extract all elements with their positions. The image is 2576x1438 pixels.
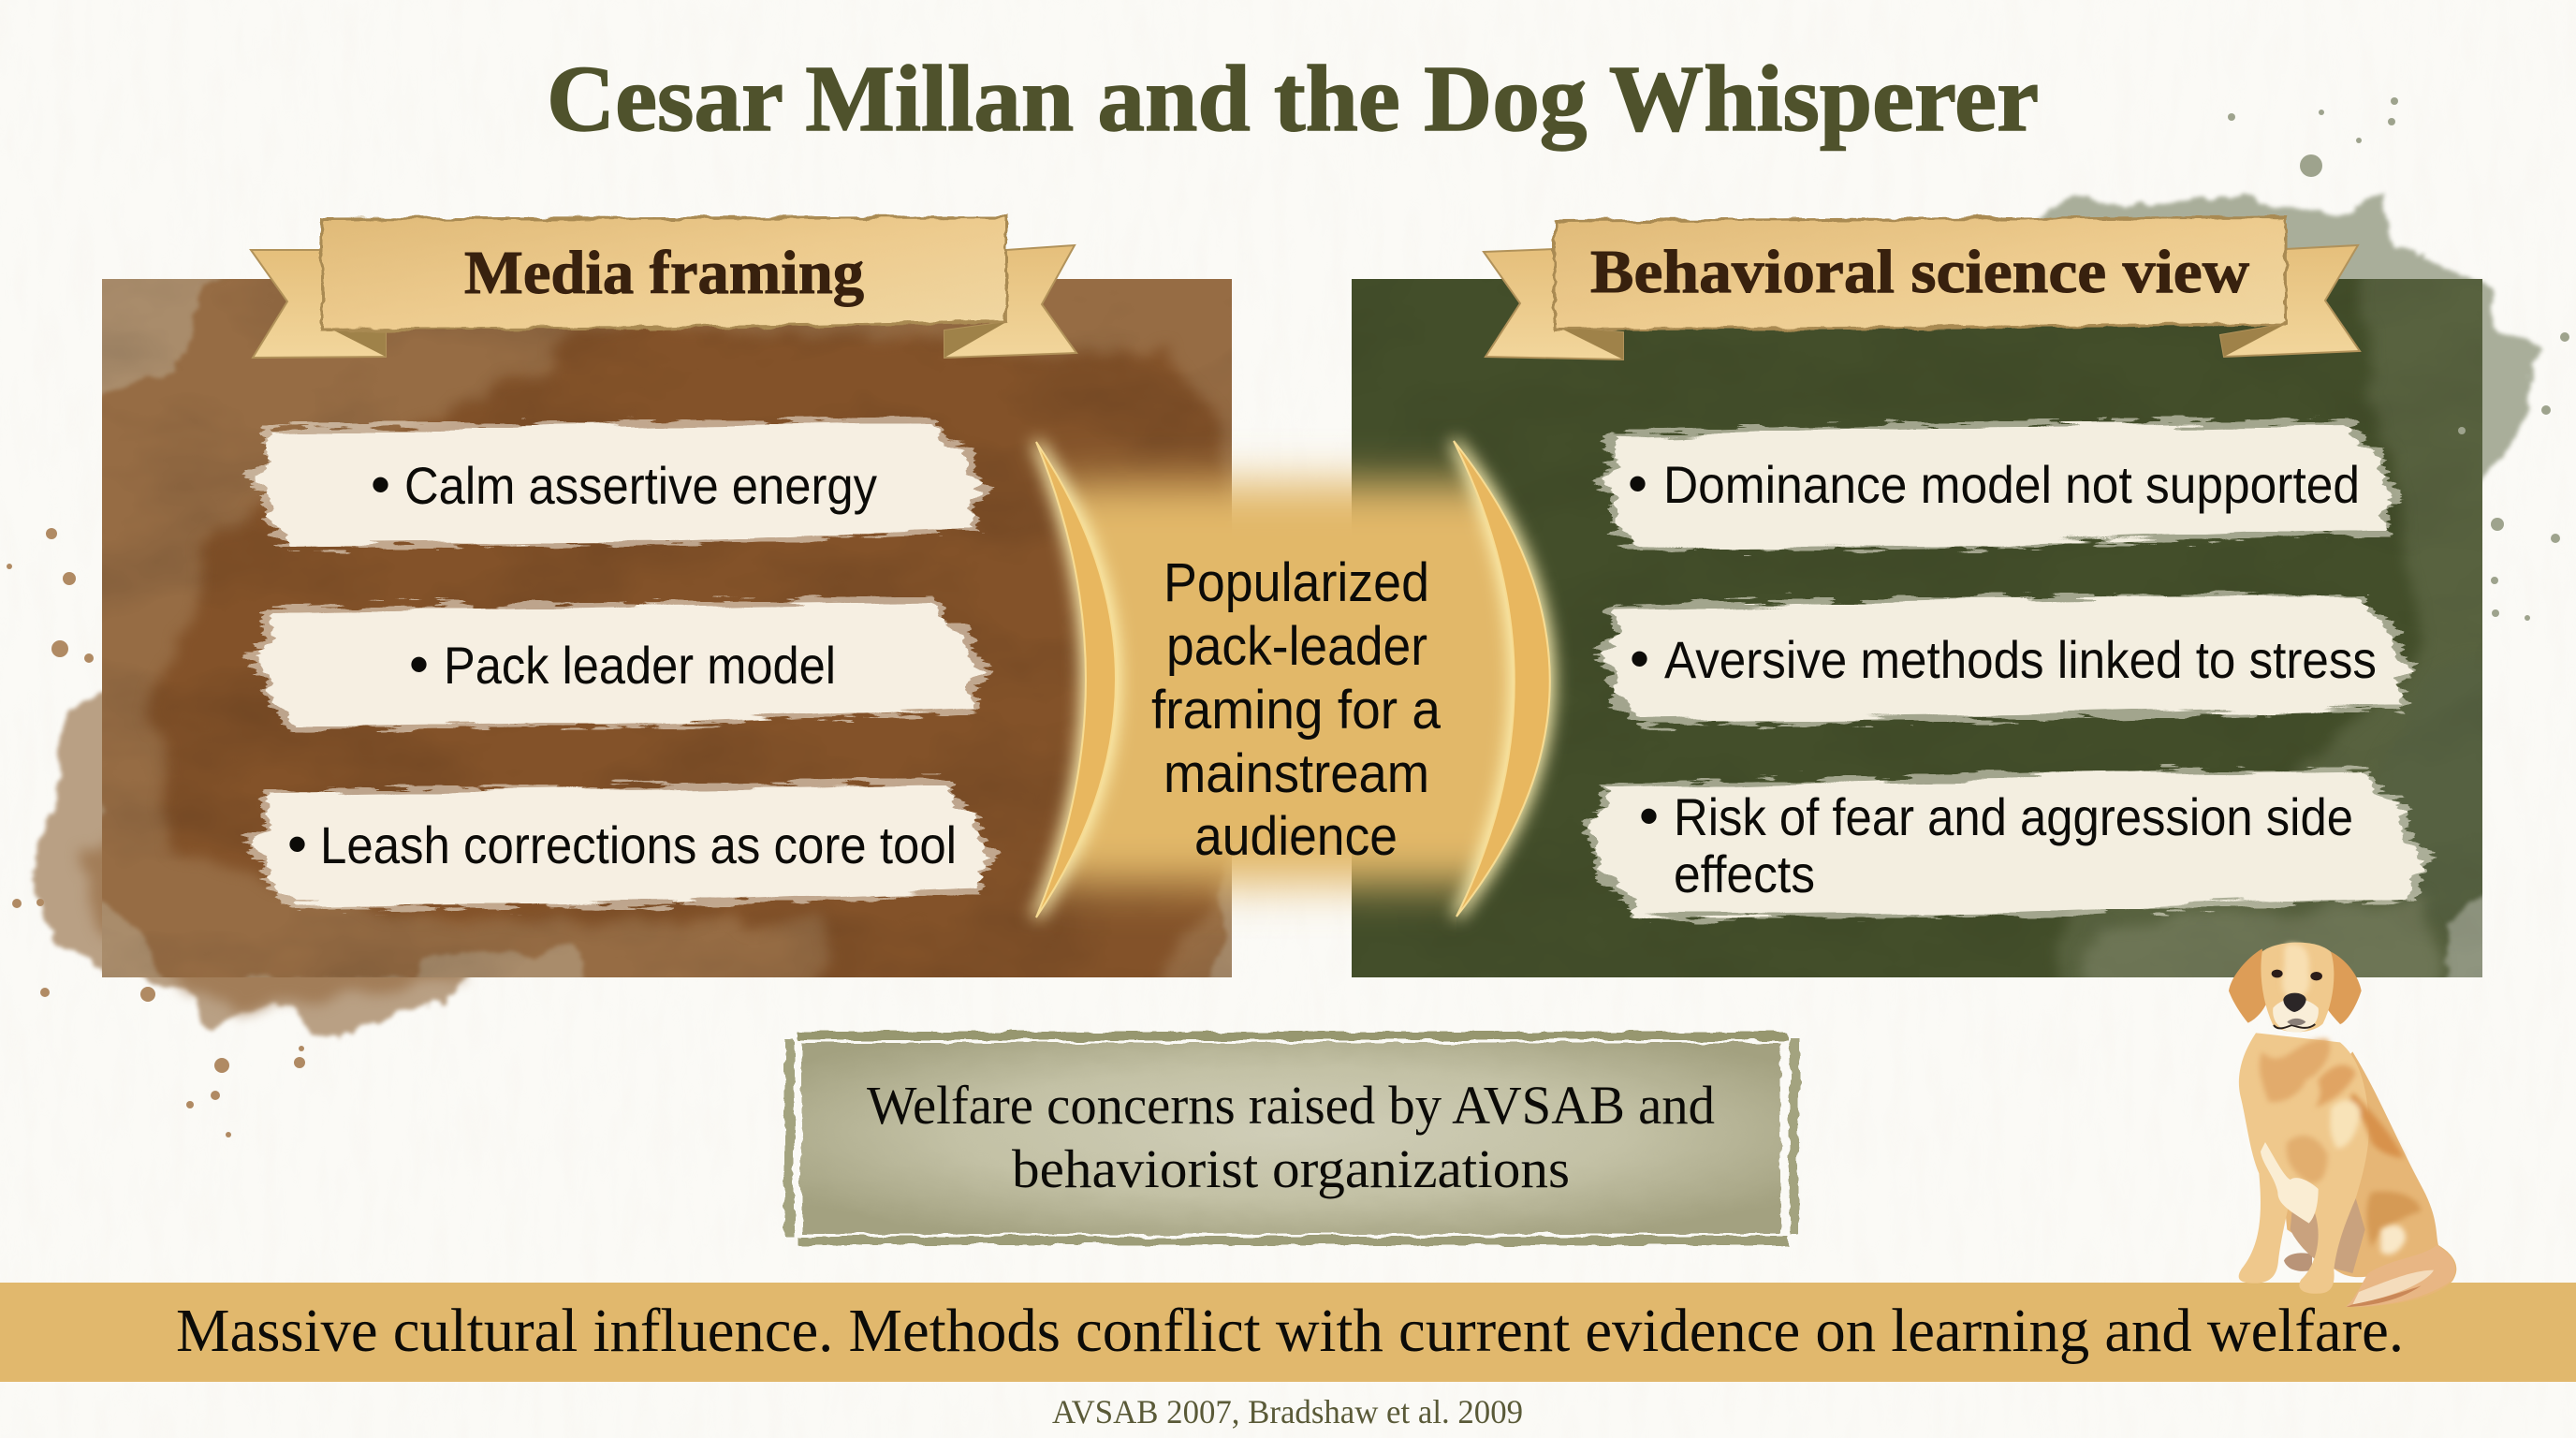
decorative splatters: left bbox=[7, 528, 305, 1137]
bullet: dominance model: Dominance model not supported bbox=[1663, 455, 2360, 514]
panel: media framing bbox=[26, 217, 1254, 1044]
bullet: risk of fear and aggression: • bbox=[1639, 785, 1659, 847]
panel: behavioral science view bbox=[1329, 189, 2546, 992]
center text: framing for a bbox=[1151, 680, 1442, 741]
icon: golden retriever bbox=[2229, 943, 2456, 1307]
callout: welfare concerns bbox=[784, 1032, 1799, 1245]
bullet: leash corrections: Leash corrections as core tool bbox=[320, 815, 957, 874]
heading ribbon: behavioral science view bbox=[1484, 217, 2360, 360]
decorative splatters: right bbox=[2228, 97, 2569, 621]
bullet: pack leader model: Pack leader model bbox=[444, 636, 836, 695]
center text: audience bbox=[1194, 806, 1398, 867]
bullet: calm assertive energy: • bbox=[371, 453, 390, 516]
bullet: dominance model bbox=[1593, 419, 2404, 551]
bullet: risk of fear and aggression bbox=[1580, 768, 2434, 919]
center text: Popularized bbox=[1164, 552, 1429, 613]
bullet: dominance model: • bbox=[1628, 452, 1647, 515]
takeaway bar bbox=[0, 1283, 2576, 1382]
callout: welfare concerns: behaviorist organizations bbox=[1012, 1138, 1570, 1199]
bullet: leash corrections: • bbox=[287, 813, 307, 875]
bullet: risk of fear and aggression: effects bbox=[1674, 844, 1815, 903]
bullet: calm assertive energy: Calm assertive energy bbox=[404, 456, 877, 515]
center text: mainstream bbox=[1164, 743, 1429, 804]
left crescent bbox=[1036, 442, 1116, 917]
center text: pack-leader bbox=[1166, 616, 1427, 677]
heading ribbon: media framing bbox=[251, 217, 1076, 358]
heading ribbon: behavioral science view: Behavioral science view bbox=[1590, 238, 2249, 306]
right crescent bbox=[1454, 441, 1550, 917]
citation: AVSAB 2007, Bradshaw et al. 2009 bbox=[1052, 1393, 1523, 1431]
center text bbox=[1151, 552, 1442, 867]
bullet: risk of fear and aggression: Risk of fear and aggression side bbox=[1674, 787, 2353, 846]
title: Cesar Millan and the Dog Whisperer bbox=[547, 46, 2039, 151]
heading ribbon: media framing: Media framing bbox=[464, 239, 864, 307]
bullet: aversive methods bbox=[1592, 593, 2422, 726]
bullet: pack leader model bbox=[244, 597, 994, 730]
takeaway bar: Massive cultural influence. Methods conflict with current evidence on learning and welfare. bbox=[176, 1297, 2404, 1365]
bullet: calm assertive energy bbox=[246, 418, 992, 549]
center connector: popularized framing bbox=[1036, 441, 1563, 917]
bullet: pack leader model: • bbox=[409, 633, 429, 696]
bullet: leash corrections bbox=[242, 779, 1001, 910]
bullet: aversive methods: Aversive methods linked to stress bbox=[1664, 630, 2377, 689]
bullet: aversive methods: • bbox=[1630, 627, 1649, 690]
callout: welfare concerns: Welfare concerns raised by AVSAB and bbox=[867, 1075, 1715, 1136]
